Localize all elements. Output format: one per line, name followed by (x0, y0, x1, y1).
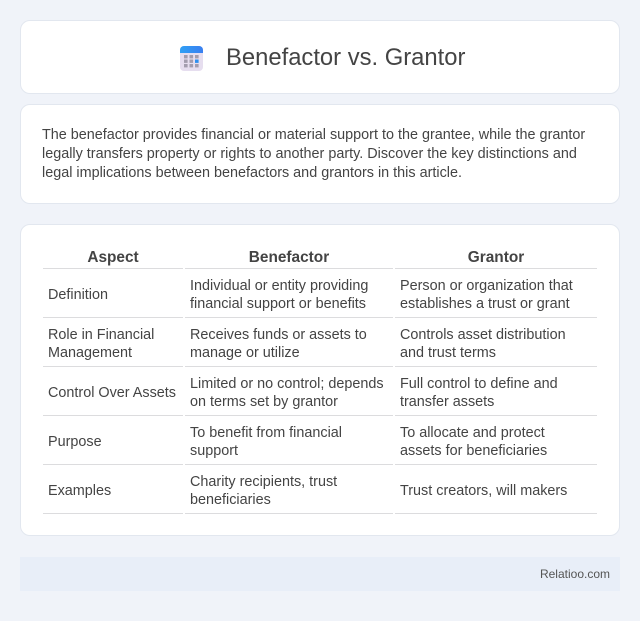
row: Definition: Individual or entity providing (190, 278, 368, 294)
row: Role in Financial Management: Receives funds or assets to (190, 327, 367, 343)
row: Definition: Definition (48, 287, 108, 303)
row: Control Over Assets: Control Over Assets (48, 385, 176, 401)
panel: comparison table card (20, 224, 620, 536)
row: Definition: financial support or benefits (190, 296, 366, 312)
row: Role in Financial Management (48, 327, 566, 361)
row: Purpose (48, 425, 547, 459)
footer bar (20, 557, 620, 591)
row: Control Over Assets (48, 376, 558, 410)
row: Role in Financial Management: Controls asset distribution (400, 327, 566, 343)
row: Purpose: assets for beneficiaries (400, 443, 547, 459)
row: Definition: Person or organization that (400, 278, 573, 294)
text block: introduction: legally transfers property or rights to another party. Discover the key distinctions and (42, 146, 577, 162)
row: Control Over Assets: Full control to define and (400, 376, 558, 392)
row: Examples: Charity recipients, trust (190, 474, 337, 490)
row: Control Over Assets: Limited or no control; depends (190, 376, 384, 392)
row: Role in Financial Management: and trust terms (400, 345, 496, 361)
text block: introduction: The benefactor provides financial or material support to the grantee, while the grantor (42, 127, 585, 143)
row: Control Over Assets: on terms set by grantor (190, 394, 338, 410)
row: Examples: Trust creators, will makers (400, 483, 567, 499)
title: Benefactor vs. Grantor (226, 44, 465, 71)
row: Examples: Examples (48, 483, 111, 499)
column header: Benefactor: Benefactor (249, 249, 329, 266)
row: Role in Financial Management: manage or utilize (190, 345, 300, 361)
row: Control Over Assets: transfer assets (400, 394, 494, 410)
row: Purpose: To benefit from financial (190, 425, 342, 441)
column header: Grantor: Grantor (468, 249, 524, 266)
row: Examples (48, 474, 567, 508)
column header: Aspect: Aspect (87, 249, 139, 266)
text block: introduction: legal implications between benefactors and grantors in this article. (42, 165, 462, 181)
row: Definition: establishes a trust or grant (400, 296, 570, 312)
row: Purpose: To allocate and protect (400, 425, 545, 441)
panel: introduction card (20, 104, 620, 204)
row: Purpose: support (190, 443, 238, 459)
row: Examples: beneficiaries (190, 492, 271, 508)
row: Role in Financial Management: Management (48, 345, 132, 361)
panel: title card (20, 20, 620, 94)
row: Definition (48, 278, 573, 312)
row: Purpose: Purpose (48, 434, 102, 450)
icon: calendar (180, 46, 203, 71)
row: Role in Financial Management: Role in Financial (48, 327, 154, 343)
text block: introduction (42, 127, 585, 181)
footer credit: Relatioo.com (540, 567, 610, 581)
